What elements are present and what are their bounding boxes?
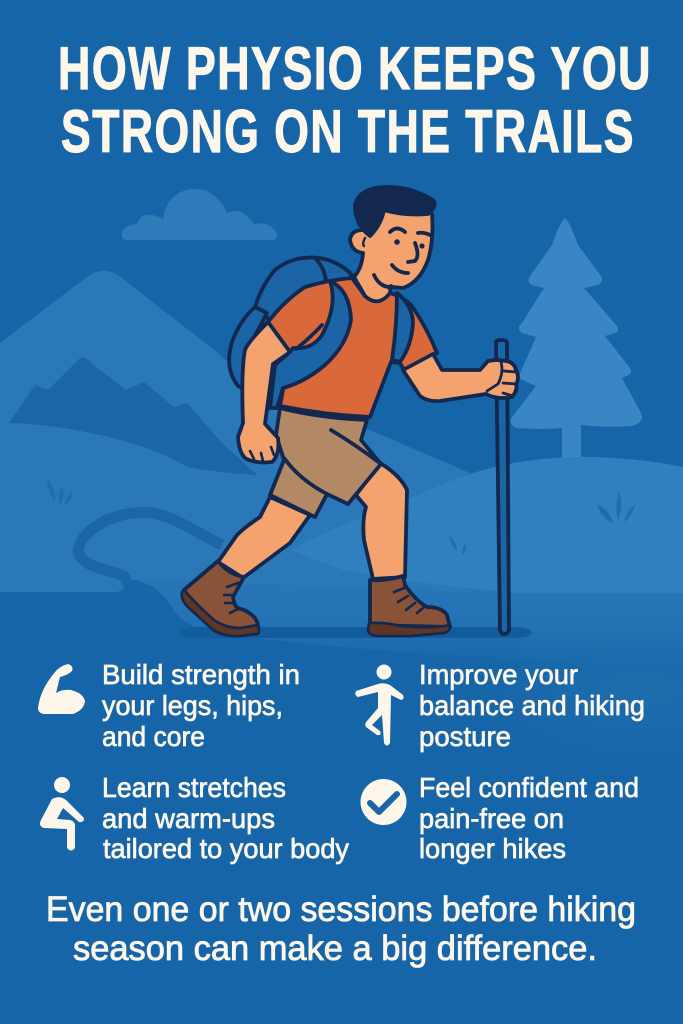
left arm and fist: [238, 322, 290, 462]
right hill: [290, 457, 683, 593]
text: improve balance: [419, 659, 645, 752]
backpack: [229, 258, 352, 390]
grass tufts: [47, 478, 635, 555]
hiker illustration: [182, 187, 518, 636]
pine tree: [511, 218, 642, 458]
distant dark mountains: [0, 357, 257, 475]
face features: [390, 228, 430, 273]
text: build strength: Build strength in: [102, 659, 300, 690]
big mountain: [0, 271, 470, 560]
closing message: Even one or two sessions before hiking: [46, 889, 636, 929]
background landscape scene: [0, 189, 683, 668]
left hill: [0, 423, 470, 592]
shorts: [270, 408, 381, 517]
hair: [355, 187, 435, 236]
text: feel confident: longer hikes: [419, 833, 566, 864]
icon: seated stretching person: [40, 777, 84, 850]
text: learn stretches: and warm-ups: [102, 803, 275, 834]
closing message: season can make a big difference.: [73, 928, 597, 968]
shirt: [268, 278, 437, 417]
front boot: [368, 576, 450, 636]
back boot: [182, 561, 259, 636]
winding trail: [78, 512, 222, 585]
back leg: [218, 497, 310, 578]
text: improve balance: Improve your: [419, 659, 578, 690]
backpack straps: [270, 281, 413, 408]
text: learn stretches: Learn stretches: [102, 772, 286, 803]
text: build strength: and core: [102, 721, 205, 752]
front leg: [356, 463, 407, 579]
icon: check mark circle: [360, 779, 406, 825]
pole: [496, 340, 509, 634]
icon: flexed arm: [38, 664, 85, 714]
text: build strength: [102, 659, 300, 752]
ground shadow: [180, 627, 532, 638]
title: [58, 35, 652, 165]
text: build strength: your legs, hips,: [102, 690, 283, 721]
text: improve balance: balance and hiking: [419, 690, 645, 721]
text: feel confident: Feel confident and: [419, 772, 639, 803]
right arm and hand: [403, 354, 518, 401]
head: [350, 187, 435, 302]
text: feel confident: [419, 772, 639, 864]
text: learn stretches: [102, 772, 349, 864]
mid ground fade: [125, 560, 683, 668]
closing message: [46, 889, 636, 968]
icon: balancing person: [355, 664, 404, 746]
text: improve balance: posture: [419, 721, 511, 752]
text: feel confident: pain-free on: [419, 803, 564, 834]
text: learn stretches: tailored to your body: [103, 833, 349, 864]
cloud: [122, 189, 277, 240]
